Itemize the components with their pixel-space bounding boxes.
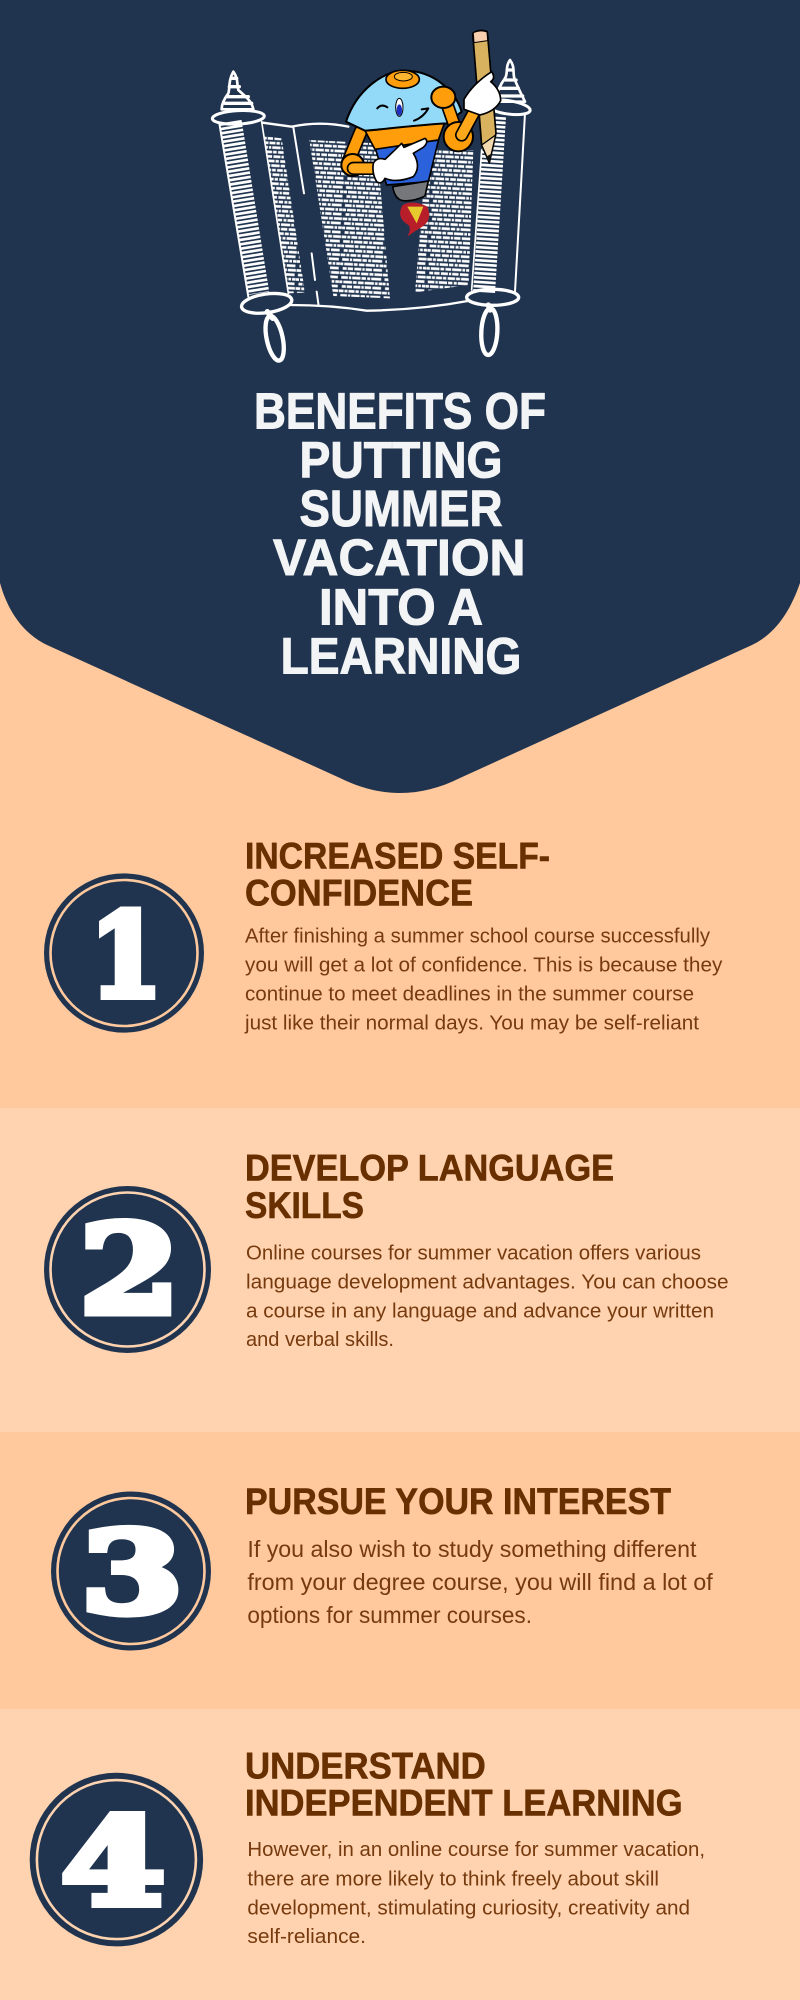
icon: number 4 badge bbox=[30, 1773, 203, 1946]
heading: develop language skills: DEVELOP LANGUAGE bbox=[245, 1148, 614, 1188]
text block: benefit 4 body: However, in an online course for summer vacation, bbox=[247, 1839, 705, 1861]
icon: number 2 badge bbox=[44, 1186, 211, 1353]
panel: benefit 1 bbox=[44, 836, 722, 1034]
section band 4 background bbox=[0, 1709, 800, 2000]
scroll text columns bbox=[263, 136, 473, 298]
icon: number 1 badge: 1 bbox=[90, 889, 162, 1024]
panel: benefit 4 bbox=[30, 1746, 705, 1948]
title: LEARNING bbox=[281, 627, 521, 684]
heading: understand independent learning bbox=[245, 1746, 683, 1824]
text block: benefit 2 body: a course in any language and advance your written bbox=[246, 1300, 714, 1322]
text block: benefit 2 body: and verbal skills. bbox=[246, 1329, 394, 1351]
title: INTO A bbox=[319, 578, 483, 635]
text block: benefit 1 body: just like their normal days. You may be self-reliant bbox=[244, 1012, 699, 1034]
heading: increased self-confidence: CONFIDENCE bbox=[245, 873, 473, 914]
text block: benefit 4 body: there are more likely to think freely about skill bbox=[247, 1868, 659, 1890]
icon: number 3 badge: 3 bbox=[82, 1508, 182, 1639]
title bbox=[254, 382, 546, 684]
illustration: scroll with robot bbox=[212, 30, 531, 362]
panel: benefit 3 bbox=[51, 1481, 713, 1650]
text block: benefit 2 body: Online courses for summer vacation offers various bbox=[246, 1242, 701, 1264]
heading: increased self-confidence bbox=[245, 836, 550, 914]
text block: benefit 1 body: After finishing a summer school course successfully bbox=[245, 926, 710, 948]
title: SUMMER bbox=[300, 480, 502, 537]
heading: develop language skills: SKILLS bbox=[245, 1185, 364, 1226]
text block: benefit 1 body: you will get a lot of confidence. This is because they bbox=[245, 954, 722, 976]
heading: understand independent learning: UNDERSTAND bbox=[245, 1746, 486, 1787]
title: PUTTING bbox=[300, 431, 502, 488]
text block: benefit 2 body bbox=[246, 1242, 729, 1351]
text block: benefit 4 body: self-reliance. bbox=[247, 1926, 366, 1948]
icon: number 1 badge bbox=[44, 873, 204, 1033]
text block: benefit 2 body: language development advantages. You can choose bbox=[246, 1271, 729, 1293]
text block: benefit 3 body bbox=[247, 1536, 713, 1628]
panel: benefit 2 bbox=[44, 1148, 729, 1353]
text block: benefit 3 body: If you also wish to study something different bbox=[247, 1536, 697, 1562]
header banner bbox=[0, 0, 800, 793]
heading: increased self-confidence: INCREASED SELF- bbox=[245, 836, 550, 877]
title: BENEFITS OF bbox=[254, 382, 546, 439]
heading: pursue your interest: PURSUE YOUR INTEREST bbox=[245, 1481, 671, 1522]
text block: benefit 3 body: options for summer courses. bbox=[247, 1602, 532, 1628]
text block: benefit 1 body bbox=[244, 926, 722, 1034]
icon: number 2 badge: 2 bbox=[80, 1198, 180, 1342]
icon: number 4 badge: 4 bbox=[61, 1792, 165, 1933]
heading: develop language skills bbox=[245, 1148, 614, 1226]
text block: benefit 4 body bbox=[247, 1839, 705, 1948]
text block: benefit 3 body: from your degree course, you will find a lot of bbox=[247, 1569, 713, 1595]
robot bbox=[341, 30, 501, 237]
icon: number 3 badge bbox=[51, 1492, 211, 1650]
text block: benefit 1 body: continue to meet deadlines in the summer course bbox=[245, 984, 694, 1006]
title: VACATION bbox=[273, 529, 526, 586]
section band 2 background bbox=[0, 1108, 800, 1432]
text block: benefit 4 body: development, stimulating curiosity, creativity and bbox=[247, 1897, 690, 1919]
scroll outline bbox=[212, 60, 531, 362]
heading: understand independent learning: INDEPENDENT LEARNING bbox=[245, 1783, 683, 1824]
